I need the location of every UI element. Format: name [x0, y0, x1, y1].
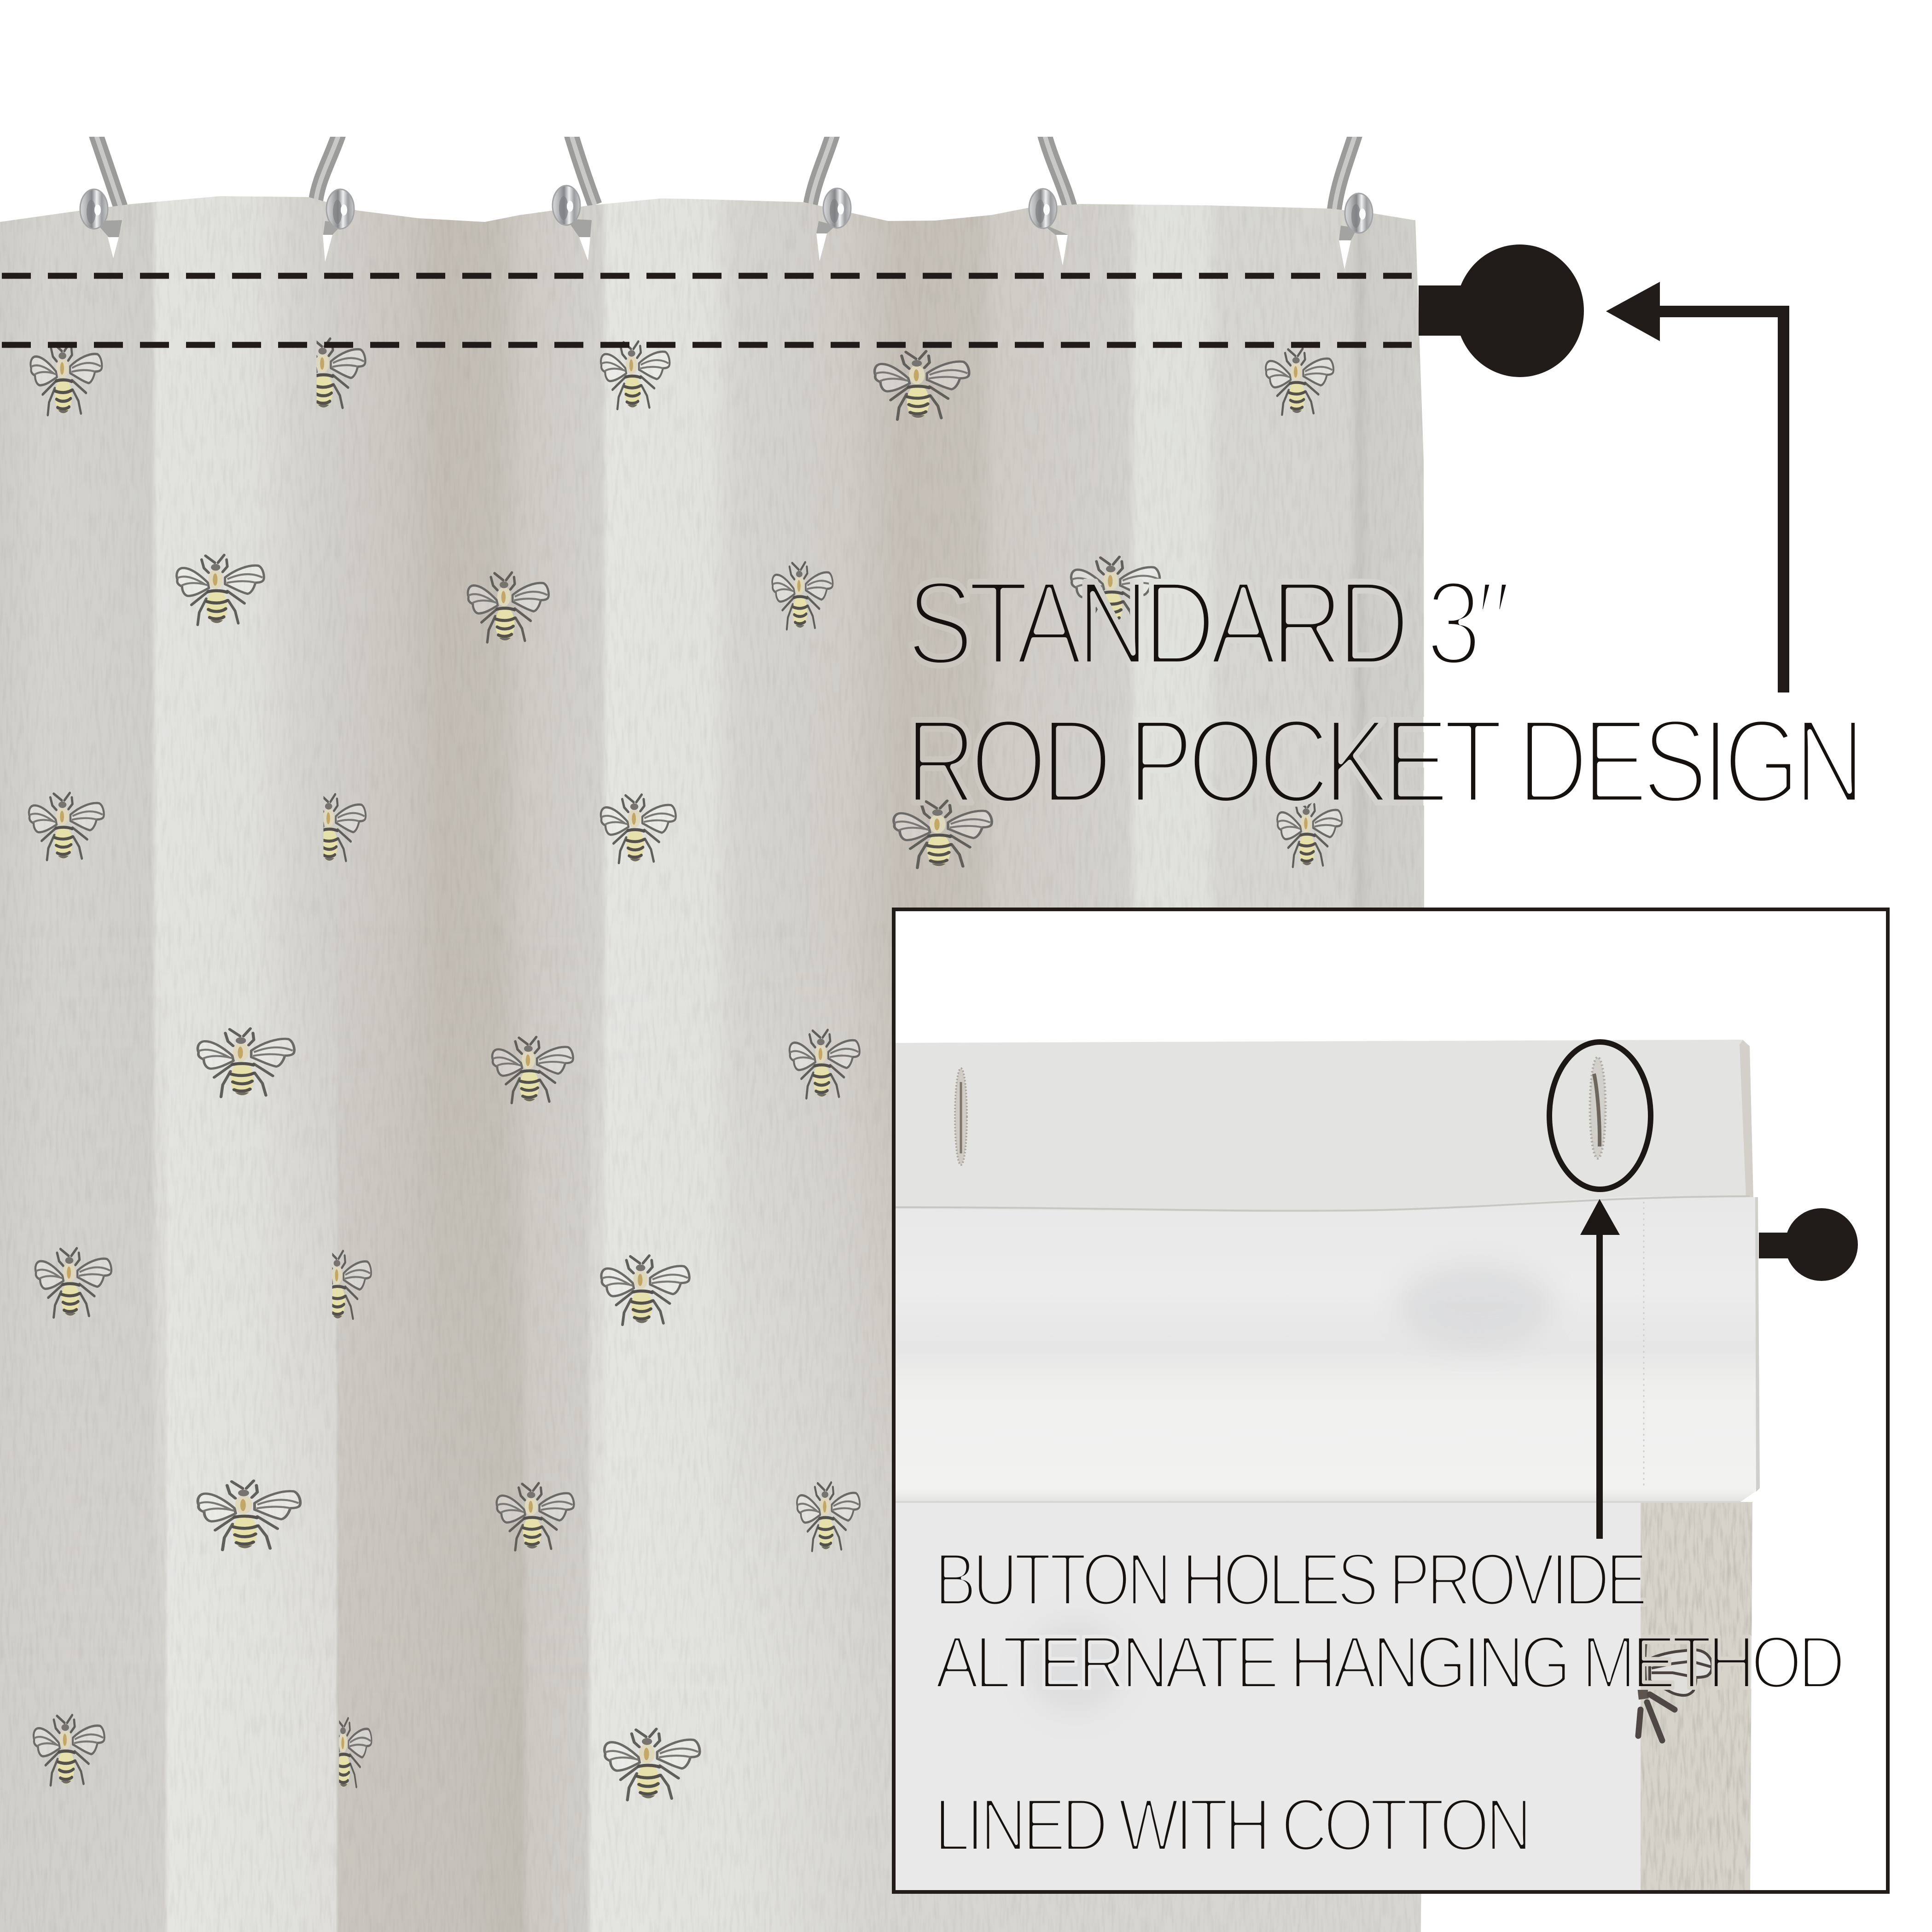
left button hole — [955, 1068, 967, 1165]
bee row 1 — [30, 339, 1333, 419]
lined with cotton label: LINED WITH COTTON — [934, 1783, 1528, 1867]
heading: standard rod pocket — [905, 556, 1859, 828]
bee row 2 — [177, 555, 1160, 642]
ring 6 — [1339, 193, 1373, 269]
ring 4 — [816, 188, 851, 261]
arrow to button hole — [1580, 1199, 1620, 1539]
ring 3 — [553, 186, 592, 261]
flap — [896, 1196, 1759, 1502]
bee pattern on curtain — [29, 339, 1342, 1800]
ghost bee on flap — [1397, 1263, 1554, 1346]
inset panel: lining detail — [894, 909, 1888, 1895]
linen strip — [1641, 1502, 1753, 1895]
panel border — [894, 909, 1888, 1892]
panel text — [934, 1538, 1842, 1867]
ring 2 — [323, 189, 354, 262]
rod pocket dashed lines — [2, 276, 1412, 345]
lower lining — [896, 1499, 1644, 1895]
icon: curtain rod end — [1419, 244, 1584, 377]
bee row 5 — [35, 1248, 689, 1325]
right button hole — [1590, 1057, 1606, 1158]
curtain rings and slits — [80, 186, 1373, 269]
panel background — [894, 909, 1888, 1892]
bee row 7 — [34, 1715, 700, 1800]
curtain fabric — [0, 184, 1437, 1932]
bee on linen strip — [1638, 1639, 1712, 1740]
bee row 6 — [198, 1481, 860, 1551]
ghost bee lower — [1024, 1618, 1126, 1715]
bee row 3 — [29, 793, 1342, 868]
bee row 4 — [198, 1029, 860, 1103]
arrow to rod — [1606, 282, 1789, 692]
icon: small rod end — [1759, 1208, 1858, 1281]
heading line 1: STANDARD 3″ — [907, 556, 1510, 690]
ring 1 — [80, 189, 122, 258]
ring 5 — [1029, 189, 1068, 266]
button hole oval callout — [1549, 1042, 1651, 1189]
button holes label line 1: BUTTON HOLES PROVIDE — [935, 1538, 1645, 1621]
lining photo — [896, 1040, 1760, 1895]
flap edge shade — [1755, 1197, 1760, 1492]
hook rods — [89, 137, 1362, 210]
top band — [896, 1040, 1753, 1218]
